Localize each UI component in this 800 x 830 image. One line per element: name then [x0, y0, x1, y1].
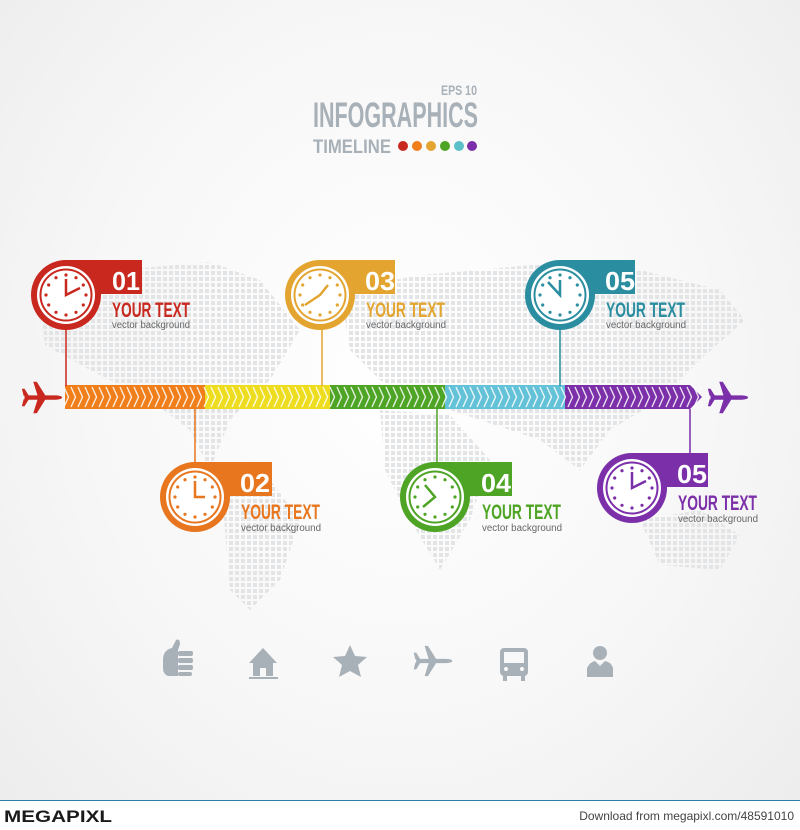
step 05 (purple): YOUR TEXT: [678, 492, 757, 515]
step 03: vector background: [366, 320, 446, 331]
step 05 (teal): [525, 260, 686, 386]
step 05 (purple): [597, 409, 758, 525]
timeline arrow band: [65, 385, 702, 409]
step 01: [31, 260, 190, 386]
step 02: 02: [240, 468, 270, 498]
step 02: [160, 409, 321, 534]
footer bar: Download from megapixl.com/48591010: [579, 809, 794, 823]
icon: bus: [500, 648, 528, 681]
step 05 (purple): vector background: [678, 514, 758, 525]
step 02: vector background: [241, 523, 321, 534]
icon: user: [587, 646, 613, 677]
icon: plane left: [22, 382, 62, 413]
icon: plane: [414, 646, 452, 676]
step 05 (purple): 05: [677, 459, 707, 489]
icon: star: [333, 645, 367, 677]
step 01: YOUR TEXT: [112, 299, 190, 322]
icon: plane right: [708, 382, 748, 413]
step 02: YOUR TEXT: [241, 501, 320, 524]
step 01: 01: [112, 266, 140, 296]
header: TIMELINE: [313, 137, 391, 158]
footer bar: [0, 800, 800, 830]
step 04: YOUR TEXT: [482, 501, 561, 524]
header: [313, 82, 478, 158]
step 01: vector background: [112, 320, 190, 331]
step 03: [285, 260, 446, 386]
icon: thumbs up: [163, 640, 193, 676]
icon row: [163, 640, 613, 681]
step 03: 03: [365, 266, 395, 296]
header: INFOGRAPHICS: [313, 96, 478, 135]
step 05 (teal): YOUR TEXT: [606, 299, 685, 322]
step 05 (teal): vector background: [606, 320, 686, 331]
step 05 (teal): 05: [605, 266, 635, 296]
footer bar: MEGAPIXL: [4, 807, 112, 826]
world map background: [40, 262, 745, 610]
step 04: vector background: [482, 523, 562, 534]
icon: house: [249, 648, 278, 679]
header: EPS 10: [441, 82, 477, 98]
step 04: [400, 409, 562, 534]
step 03: YOUR TEXT: [366, 299, 445, 322]
step 04: 04: [481, 468, 512, 498]
